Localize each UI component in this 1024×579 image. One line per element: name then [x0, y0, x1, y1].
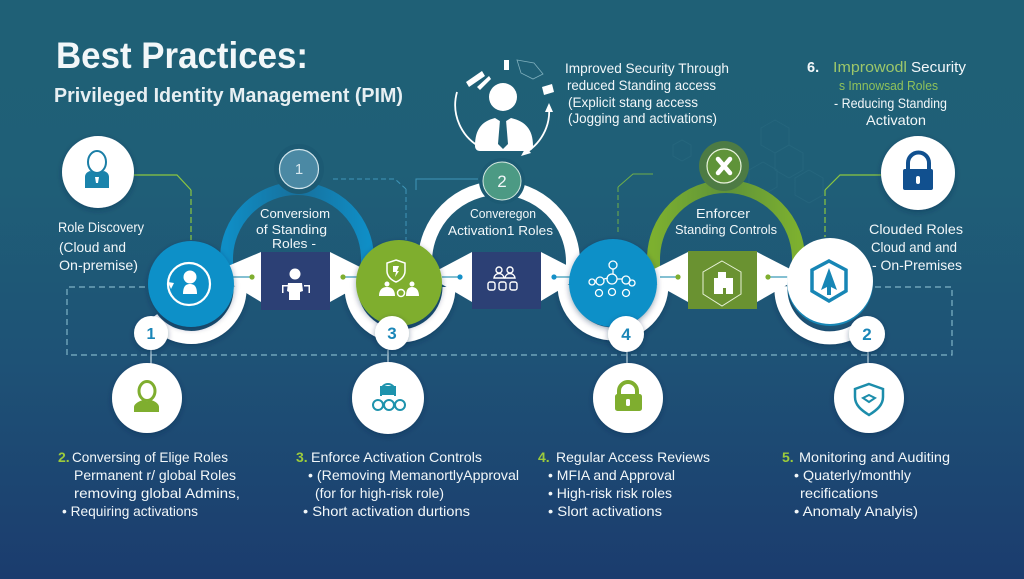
- text block: step 4: [538, 449, 710, 519]
- icon circle: lower green lock: [593, 363, 663, 433]
- white badge 1: [134, 316, 168, 350]
- connector: arch two to arch three: [618, 174, 653, 233]
- icon: hexagon with cross: [703, 261, 741, 306]
- icon: padlock: [903, 152, 933, 190]
- connector: role discovery to blue node: [134, 175, 191, 240]
- badge: arch number 2: [479, 158, 525, 204]
- arch label: conversion: of Standing: [256, 222, 327, 237]
- text block: clouded roles: - On-Premises: [872, 257, 962, 273]
- icon circle: lower person: [112, 363, 182, 433]
- icon: person badge: [85, 151, 109, 188]
- text block: step 2: [58, 449, 240, 519]
- text block: step 5: 5.: [782, 449, 794, 465]
- white badge 1: 1: [147, 326, 156, 343]
- text block: step 4: • High-risk risk roles: [548, 485, 672, 501]
- text block: role discovery: On-premise): [59, 257, 138, 273]
- arch label: conversion: [256, 206, 330, 251]
- stems to lower icons: [151, 350, 868, 366]
- text block: clouded roles: [869, 221, 963, 273]
- node: blue role discovery: [148, 241, 234, 327]
- text block: step 5: • Quaterly/monthly: [794, 467, 911, 483]
- connector: arch one to green node: [333, 179, 406, 240]
- decorative hexagons: [673, 120, 823, 203]
- white badge 3: 3: [387, 324, 397, 343]
- connector panel: navy two: [438, 252, 576, 309]
- text block: item 6: 6.: [807, 60, 819, 76]
- text block: role discovery: Role Discovery: [58, 219, 144, 235]
- text block: step 2: 2.: [58, 449, 70, 465]
- icon circle: role discovery: [62, 136, 134, 208]
- subtitle: Privileged Identity Management (PIM): [54, 85, 403, 107]
- text block: step 4: 4.: [538, 449, 550, 465]
- arch: conversion of standing roles: [226, 189, 368, 270]
- arch label: activation: Activation1 Roles: [448, 223, 554, 238]
- white badge 3: [375, 316, 409, 350]
- icon circle: lower lock group: [352, 362, 424, 434]
- text block: step 3: • Short activation durtions: [303, 503, 470, 519]
- text block: item 6: s Imnowsad Roles: [839, 79, 938, 93]
- badge: arch number 2: 2: [497, 172, 507, 191]
- connector: arch two stub: [416, 179, 478, 190]
- icon: user group: [488, 267, 517, 290]
- white badge 2: [849, 316, 885, 352]
- text block: item 6: Improwodl: [833, 60, 907, 76]
- text block: step 5: • Anomaly Analyis): [794, 503, 918, 519]
- white badge 2: 2: [862, 325, 872, 344]
- dashed connector frame: [67, 287, 952, 355]
- badge: arch number 1: 1: [295, 161, 303, 178]
- icon: hexagon tool: [812, 261, 846, 301]
- arch label: conversion: Conversiom: [260, 206, 330, 221]
- step ring: blue node: [152, 286, 240, 337]
- icon: green padlock: [615, 382, 642, 411]
- icon: network cluster: [589, 261, 635, 296]
- white badge 4: [608, 316, 644, 352]
- text block: step 2: removing global Admins,: [74, 485, 240, 501]
- arch label: enforcer: Standing Controls: [675, 222, 777, 237]
- text block: improved security: (Jogging and activations): [568, 110, 717, 126]
- title: Best Practices:: [56, 35, 308, 76]
- text block: step 3: 3.: [296, 449, 308, 465]
- badge: arch tools: [699, 141, 749, 191]
- arch label: conversion: Roles -: [272, 236, 316, 251]
- step ring: white node: [781, 286, 866, 338]
- text block: improved security: [565, 60, 729, 126]
- step ring: green node: [351, 287, 449, 336]
- text block: step 4: • Slort activations: [548, 503, 662, 519]
- text block: improved security: Improved Security Through: [565, 60, 729, 76]
- text block: step 3: (for for high-risk role): [315, 485, 444, 501]
- white badge 4: 4: [621, 325, 631, 344]
- connector panel: green square: [652, 251, 792, 309]
- node: green: [356, 240, 442, 326]
- icon: executive with rotating arrows: [455, 60, 554, 156]
- text block: role discovery: [58, 219, 144, 273]
- icon circle: lower shield: [834, 363, 904, 433]
- badge: arch number 1: [274, 144, 324, 194]
- icon circle: lock: [881, 136, 955, 210]
- text block: clouded roles: Cloud and and: [871, 239, 957, 255]
- text block: clouded roles: Clouded Roles: [869, 221, 963, 237]
- text block: step 5: recifications: [800, 485, 878, 501]
- icon: person with brackets: [282, 268, 310, 300]
- text block: item 6: [807, 60, 967, 128]
- text block: step 2: Permanent r/ global Roles: [74, 467, 236, 483]
- text block: step 3: • (Removing MemanortlyApproval: [308, 467, 519, 483]
- text block: step 4: Regular Access Reviews: [556, 449, 710, 465]
- text block: item 6: Security: [911, 60, 967, 76]
- connector panel: navy one: [228, 252, 366, 310]
- arch: activation roles: [425, 188, 573, 268]
- connector: lock to white node: [825, 175, 881, 237]
- text block: item 6: Activaton: [866, 112, 926, 128]
- icon: teal shield: [855, 384, 883, 415]
- text block: step 3: [296, 449, 519, 519]
- arch label: activation: Converegon: [470, 206, 536, 221]
- arch label: enforcer: Enforcer: [696, 206, 751, 221]
- arch label: activation: [448, 206, 554, 238]
- text block: step 2: Conversing of Elige Roles: [72, 449, 228, 465]
- text block: step 4: • MFIA and Approval: [548, 467, 675, 483]
- step ring: second blue node: [564, 285, 662, 334]
- arch: enforcer standing controls: [654, 186, 798, 270]
- node: blue regular: [569, 239, 657, 327]
- text block: step 5: [782, 449, 950, 519]
- text block: step 2: • Requiring activations: [62, 503, 198, 519]
- text block: step 5: Monitoring and Auditing: [799, 449, 950, 465]
- icon: shield with team: [379, 260, 419, 296]
- node: white: [787, 238, 873, 326]
- text block: improved security: (Explicit stang access: [568, 94, 698, 110]
- text block: item 6: - Reducing Standing: [834, 95, 947, 111]
- text block: step 3: Enforce Activation Controls: [311, 449, 482, 465]
- text block: improved security: reduced Standing access: [567, 77, 716, 93]
- icon: user with refresh ring: [168, 263, 210, 305]
- icon: teal group: [373, 384, 405, 410]
- icon: green person: [134, 382, 159, 412]
- arch label: enforcer: [675, 206, 777, 237]
- text block: role discovery: (Cloud and: [59, 239, 126, 255]
